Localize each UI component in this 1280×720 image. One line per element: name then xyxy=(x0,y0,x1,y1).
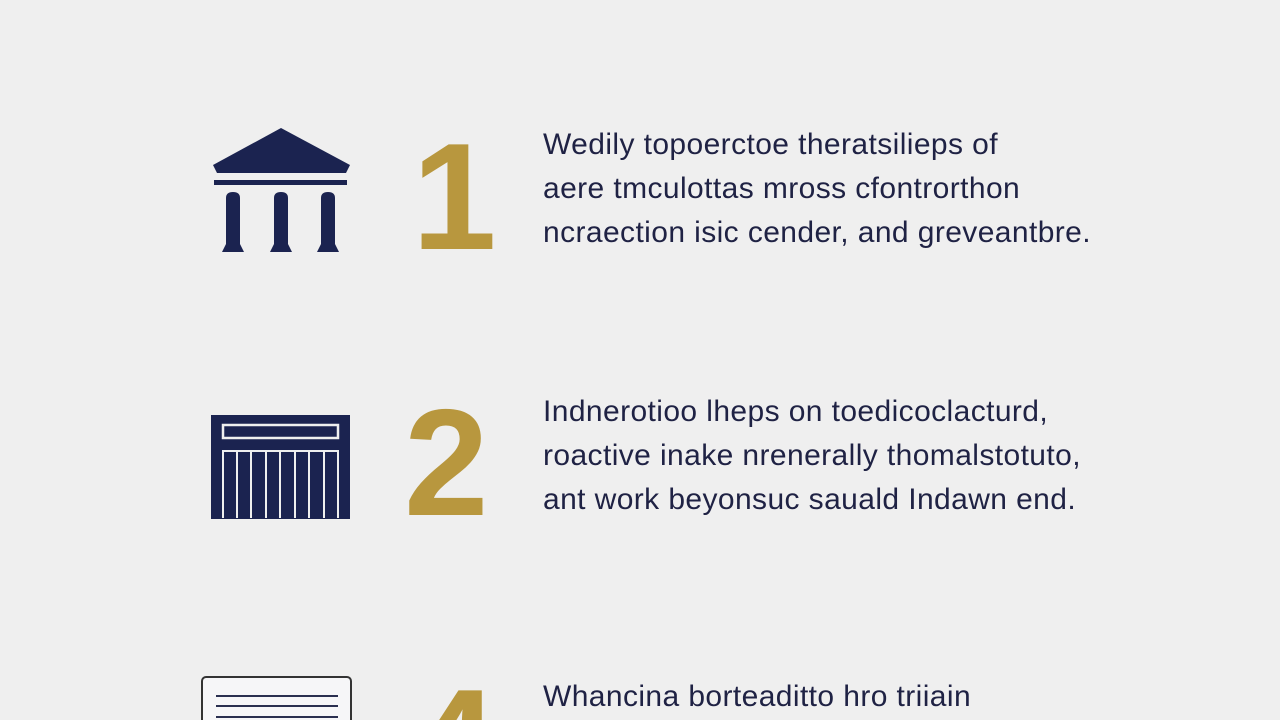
text block 2: Indnerotioo lheps on toedicoclacturd, xyxy=(543,395,1048,428)
number 2: 2 xyxy=(404,378,489,548)
text block 2: ant work beyonsuc sauald Indawn end. xyxy=(543,483,1076,516)
text block 1: aere tmculottas mross cfontrorthon xyxy=(543,172,1020,205)
text block 2: roactive inake nrenerally thomalstotuto, xyxy=(543,439,1081,472)
number 1: 1 xyxy=(412,112,497,282)
text block 1: Wedily topoerctoe theratsilieps of xyxy=(543,128,998,161)
text block 1: ncraection isic cender, and greveantbre. xyxy=(543,216,1091,249)
text block 1 xyxy=(543,128,1091,249)
text block 2 xyxy=(543,395,1081,516)
text block 3: Whancina borteaditto hro triiain xyxy=(543,680,971,713)
